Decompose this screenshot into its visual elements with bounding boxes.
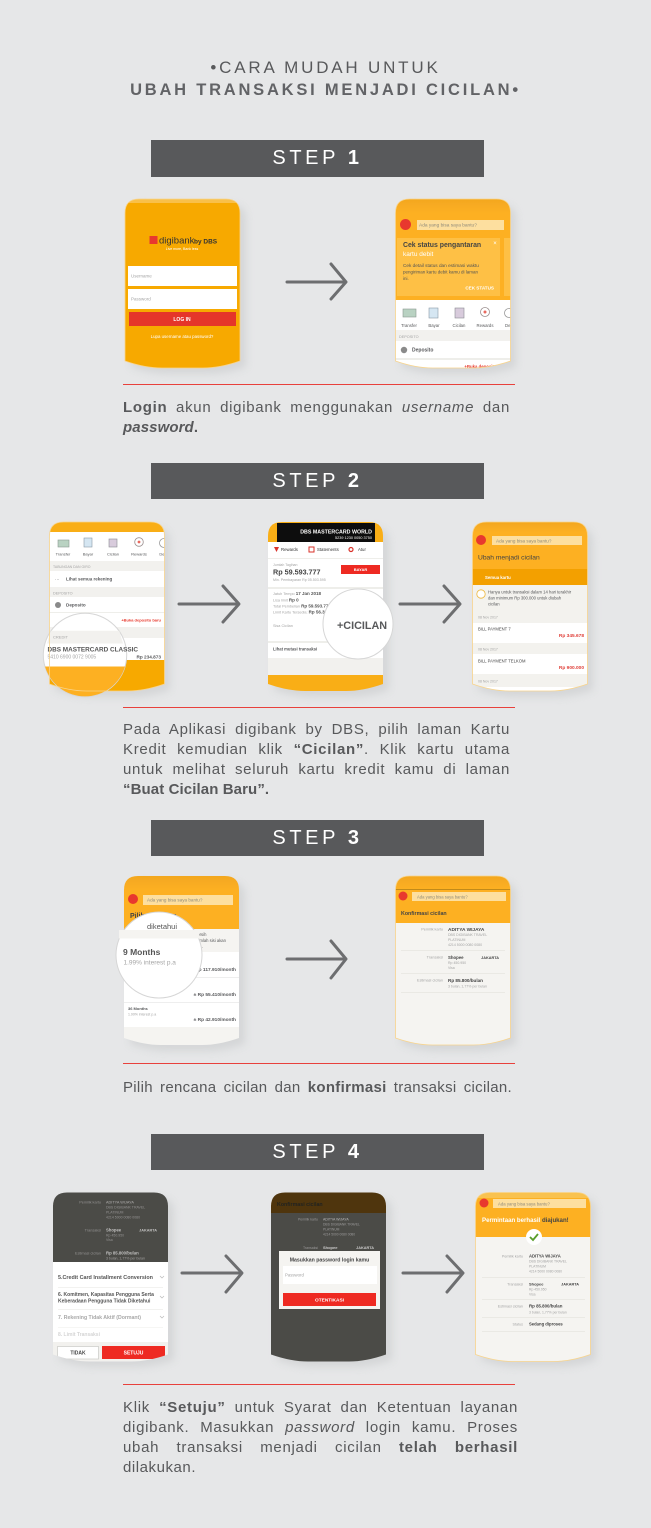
phone: permintaan berhasil screen [475,1192,592,1363]
account rows [49,561,165,695]
result details: Visa [529,1292,536,1296]
phone: digibank login screen [125,199,240,369]
status card: × [493,241,497,247]
magnifier: +CICILAN [323,589,393,659]
title [130,58,521,99]
confirmation details: 4214 5000 0080 0080 [448,943,482,947]
result details: 3 bulan, 1,77% per bulan [529,1310,567,1314]
result details: PLATINUM [529,1264,546,1268]
dimmed details: Pemilik kartu [298,1218,318,1222]
transaction rows: Rp 345.678 [559,633,584,639]
heading: step 2 [151,463,484,499]
dimmed details [298,1218,374,1250]
password modal: OTENTIKASI [315,1298,345,1304]
card header: 5239 1230 0050 3750 [335,536,372,540]
success heading: Permintaan berhasil diajukan! [482,1217,569,1224]
text: step 2 description: Pada Aplikasi digibank by DBS, pilih laman Kartu [123,721,510,738]
dimmed details: Visa [106,1238,113,1242]
plan rows: 1.99% interest p.a [128,1012,156,1016]
dimmed details: Pemilik kartu [79,1200,101,1204]
success check icon [526,1229,542,1245]
text: step 2 description: untuk melihat seluruh kartu kredit kamu di laman [123,761,510,778]
terms sheet: Keberadaan Pengguna Tidak Diketahui [58,1298,151,1304]
filter band [472,569,588,585]
result details: Estimasi cicilan [498,1304,523,1308]
phone: password modal screen [271,1192,386,1363]
magnifier: 9 months: diketahui [147,922,177,931]
quick menu icons: Rewards [477,323,493,328]
account rows: Lihat semua rekening [66,576,113,582]
dimmed details: JAKARTA [139,1228,157,1232]
username input [128,266,237,286]
phone: konfirmasi cicilan screen [395,876,511,1046]
note text [199,932,226,948]
confirmation details: Transaksi [427,956,443,960]
status card: Cek status pengantaran [403,242,481,249]
text: step 4 description [123,1399,518,1476]
dimmed details: Transaksi [85,1228,101,1232]
confirmation details [401,927,505,993]
divider: step 4 [123,1384,515,1385]
result details: Shopee [529,1282,544,1286]
heading: step 3 [151,820,484,856]
text: step 1 description: password. [123,419,198,436]
billing summary: Limit Kartu Tersedia: Rp 56.351 [273,610,330,614]
text: step 1 description [50,200,587,658]
magnifier: credit card row: 5410 6900 0072 9005 [48,654,96,660]
status card: kartu debit [403,251,434,258]
transaction rows: 08 Nov 2017 [478,648,498,652]
result details: Rp 450.950 [529,1288,547,1292]
text: step 2 description: Kredit kemudian klik “Cicilan”. Klik kartu utama [123,741,510,758]
confirmation details: Estimasi cicilan [417,978,443,982]
heading: step 4 [151,1134,484,1170]
transaction rows: 08 Nov 2017 [478,616,498,620]
decline and agree buttons [53,1342,168,1363]
quick menu icons [401,308,514,328]
billing summary: Jumlah Tagihan [273,563,298,567]
dimmed details: Rp 85.800/bulan [106,1250,139,1256]
quick menu icons: Dep [505,323,514,328]
arrow: step 2 second [400,586,460,622]
dimmed details: JAKARTA [356,1246,374,1250]
username input: Username [131,274,152,278]
phone: credit card detail screen [268,522,384,693]
dimmed details: ADITYA WIJAYA [323,1218,349,1222]
terms sheet: 8. Limit Transaksi [58,1332,101,1338]
decline and agree buttons: SETUJU [124,1350,144,1356]
arrow: step 1 [287,264,346,299]
phone: ubah menjadi cicilan screen [472,522,588,693]
transaction rows: 08 Nov 2017 [478,680,498,684]
tabs: Atur [358,547,366,552]
result details: ADITYA WIJAYA [529,1254,561,1258]
heading: step 2: STEP 2 [272,470,363,492]
quick menu icons: Rewards [131,552,147,556]
heading: step 4: STEP 4 [272,1141,363,1163]
quick menu icons: Bayar [428,323,440,328]
quick menu icons: Cicilan [107,552,119,556]
confirmation details: JAKARTA [481,956,499,960]
card header [277,523,375,542]
heading: step 3: STEP 3 [272,827,363,849]
divider: step 3 [123,1063,515,1064]
screen heading: Pilihan cicilan [130,913,177,920]
phone shadows [55,205,596,1367]
phone: card list screen [49,522,168,695]
status card: ini. [403,276,409,281]
search bar: Ada yang bisa saya bantu? [147,898,203,902]
deposit section: DEPOSITO [399,335,419,339]
logo: digibank by DBS: digibank [159,236,195,246]
result details [482,1254,585,1332]
search bar [493,1199,586,1208]
title: UBAH TRANSAKSI MENJADI CICILAN• [130,81,521,99]
plan rows: 36 Months [128,1006,149,1011]
text: step 3 description: Pilih rencana cicilan dan konfirmasi transaksi cicilan. [123,1079,512,1096]
account rows: +Buka deposito baru [121,618,162,622]
billing summary: Rp 59.593.777 [273,568,321,576]
magnifier: 9 months: 9 Months [123,947,161,957]
billing summary: Sisa Cicilan [273,624,293,628]
magnifier: credit card row: CREDIT [53,634,68,640]
confirmation details: Visa [448,966,455,970]
terms sheet: 6. Komitmen, Kapasitas Pengguna Serta [58,1292,154,1298]
transaction rows: BILL PAYMENT TELKOM [478,658,526,664]
dimmed details: Transaksi [303,1246,318,1250]
account rows: DEPOSITO [53,592,73,596]
billing summary: Jatuh Tempo 17 Jan 2018 [273,591,322,596]
result details: Transaksi [507,1282,523,1286]
dimmed details: Estimasi cicilan [75,1252,101,1256]
result details: DBS DIGIBANK TRAVEL [529,1260,567,1264]
password input [128,289,237,309]
arrow: step 3 [287,941,346,978]
magnifier: credit card row: DBS MASTERCARD CLASSIC [48,646,138,654]
search bar [417,220,504,230]
search bar: Ada yang bisa saya bantu? [417,894,468,900]
dimmed details [75,1200,157,1260]
quick menu icons: Cicilan [453,323,466,328]
text: step 4 description: digibank. Masukkan password login kamu. Proses [123,1419,518,1436]
confirmation details: Rp 450.950 [448,961,466,965]
billing summary: Lihat mutasi transaksi [273,646,317,652]
divider: step 2 [123,707,515,708]
transaction rows: Rp 900.000 [559,665,584,671]
dimmed details: 4214 5000 0080 0080 [323,1232,355,1236]
info note [477,590,572,606]
search bar [412,892,506,901]
confirmation details: Shopee [448,955,464,960]
quick menu icons: Dep [159,552,167,556]
plan rows [124,952,239,1027]
quick menu icons: Transfer [56,552,71,556]
text: step 4 description: dilakukan. [123,1459,196,1476]
result details: JAKARTA [561,1282,579,1286]
text: step 4 description: Klik “Setuju” untuk Syarat dan Ketentuan layanan [123,1399,518,1416]
heading: step 1 [151,140,484,177]
search bar: Ada yang bisa saya bantu? [498,1202,550,1206]
plan rows: ± Rp 42.910/month [194,1017,236,1023]
forgot password link: Lupa username atau password? [151,334,214,339]
confirmation details: PLATINUM [448,938,466,942]
magnifier: 9 months [116,912,202,998]
password input: Password [131,296,151,302]
dimmed details: PLATINUM [106,1210,124,1214]
billing summary: Lisa limit Rp 0 [273,598,299,602]
phone: dashboard screen [395,199,514,369]
status card: pengiriman kartu debit kamu di laman [403,270,479,274]
heading: step 1: STEP 1 [272,147,363,169]
password modal [279,1251,380,1309]
note text: nya. [195,944,203,949]
account rows: ··· [55,576,60,582]
divider: step 1 [123,384,515,385]
status card: Cek detail status dan estimasi waktu [403,263,479,268]
transaction rows [472,616,588,693]
phone: syarat dan ketentuan screen [53,1192,168,1363]
magnifier: 9 months: 1.99% interest p.a [124,960,176,966]
back button [398,892,408,900]
terms sheet: 7. Rekening Tidak Aktif (Dormant) [58,1315,141,1321]
deposit section: Deposito [412,348,433,354]
status card [397,238,514,296]
plan rows: ± Rp 55.410/month [194,992,236,998]
magnifier: credit card row [43,613,138,697]
terms sheet [53,1262,168,1342]
card header: DBS MASTERCARD WORLD [300,530,372,536]
note text: Jumlah sisi akan [195,938,227,943]
plan rows: ± Rp 117.910/month [191,967,236,973]
search bar: Ada yang bisa saya bantu? [496,538,552,544]
billing summary: BAYAR [354,567,367,572]
phone: pilihan cicilan screen [124,876,239,1046]
terms sheet: 5.Credit Card Installment Conversion [58,1275,153,1281]
text: step 2 description: “Buat Cicilan Baru”. [123,781,269,798]
dimmed details: 4214 5000 0080 0080 [106,1216,140,1220]
status card: CEK STATUS [465,286,494,290]
arrow: step 4 second [403,1256,463,1292]
logo: digibank by DBS: by DBS [194,238,218,246]
screen heading: Konfirmasi cicilan [401,911,447,917]
tabs: Rewards [281,547,298,552]
dimmed details: 3 bulan, 1,77% per bulan [106,1256,145,1260]
billing summary: Total Pembelian Rp 59.593.777 [273,604,331,608]
screen heading: Ubah menjadi cicilan [478,554,540,562]
login button [129,312,236,326]
confirmation details: DBS DIGIBANK TRAVEL [448,933,487,937]
result details: Sedang diproses [529,1322,563,1326]
text: step 2 description [123,721,510,1044]
info note: dan minimum Rp 300.000 untuk diubah [488,596,562,600]
arrow: step 2 first [179,586,239,622]
filter band: Semua kartu [485,575,511,580]
login button: LOG IN [173,317,191,323]
deposit section: +Buka deposito baru [464,364,507,369]
transaction rows: BILL PAYMENT 7 [478,626,511,632]
close button [480,1198,488,1208]
note text: bersih [195,932,207,937]
dimmed details: ADITYA WIJAYA [106,1200,134,1204]
phone outlines [50,199,590,1362]
info note: cicilan [488,602,500,606]
info note: Hanya untuk transaksi dalam 14 hari terakhir [488,590,572,594]
result details: Pemilik kartu [502,1254,523,1258]
back button [476,535,486,545]
dimmed heading: Konfirmasi cicilan [277,1202,323,1208]
account rows: TABUNGAN DAN GIRO [53,565,91,569]
confirmation details: 3 bulan, 1,77% per bulan [448,984,487,988]
account rows: Rp 234.873 [136,654,161,660]
magnifier: +CICILAN: +CICILAN [337,620,387,632]
password modal: Password [285,1272,304,1278]
search bar [143,895,233,905]
dimmed details: DBS DIGIBANK TRAVEL [323,1222,360,1226]
arrow: step 4 first [182,1256,242,1292]
tabs: Statements [317,547,339,552]
confirmation details: ADITYA WIJAYA [448,927,485,933]
result details: Rp 85.800/bulan [529,1304,563,1308]
tabs [268,547,384,559]
result details: 4214 5000 0080 0080 [529,1270,562,1274]
menu button [400,219,411,230]
password modal: Masukkan password login kamu [290,1258,369,1264]
quick menu icons: Bayar [83,552,94,556]
billing summary: Min. Pembayaran Rp 05.503.595 [273,578,326,582]
billing summary [268,563,384,693]
search bar: Ada yang bisa saya bantu? [419,222,477,228]
dimmed details: PLATINUM [323,1228,340,1232]
back button [128,894,138,904]
dimmed details: Shopee [323,1245,338,1250]
confirmation details: Rp 85.800/bulan [448,978,483,983]
dimmed details: DBS DIGIBANK TRAVEL [106,1206,145,1210]
text: step 1 description: Login akun digibank menggunakan username dan [123,399,510,416]
logo: digibank by DBS: Live more, Bank less [166,247,198,251]
text: step 4 description: ubah transaksi menjadi cicilan telah berhasil [123,1439,518,1456]
title: •CARA MUDAH UNTUK [210,58,441,77]
search bar [492,536,582,545]
deposit section [395,330,511,369]
quick menu icons: Transfer [401,323,417,328]
decline and agree buttons: TIDAK [70,1350,86,1356]
account rows: Deposito [66,602,86,608]
quick menu icons [56,538,168,556]
result details: Status [513,1322,523,1326]
confirmation details: Pemilik kartu [421,928,443,932]
dimmed details: Shopee [106,1228,122,1232]
dimmed details: Rp 450.950 [106,1234,124,1238]
logo: digibank by DBS [150,236,218,251]
